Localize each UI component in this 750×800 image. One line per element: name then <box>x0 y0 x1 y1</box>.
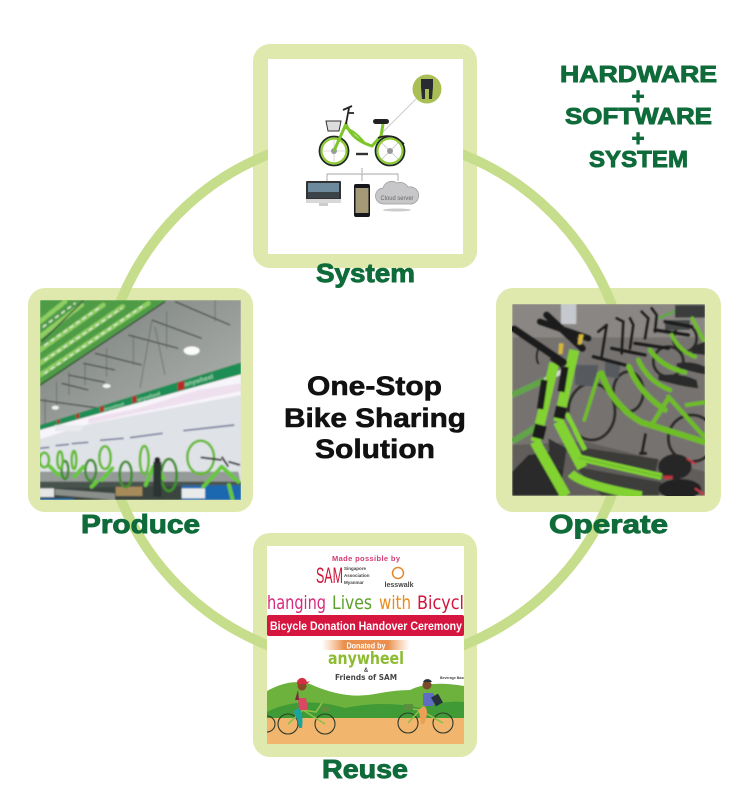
scooter decks <box>578 448 658 473</box>
photo: bike factory: anywheel <box>184 374 214 389</box>
callout: hardware software system: SYSTEM <box>589 146 688 172</box>
scooter stems <box>535 350 662 496</box>
panel: reuse <box>259 546 467 744</box>
poster: bicycle donation ceremony: Beverage Bases <box>440 676 467 680</box>
heading: system label: System <box>316 258 415 288</box>
heading: operate label: Operate <box>549 509 668 539</box>
poster: bicycle donation ceremony: Made possible by <box>332 554 401 563</box>
title: one-stop bike sharing solution: Bike Sharing <box>284 403 466 433</box>
poster: bicycle donation ceremony: lesswalk <box>384 582 414 589</box>
poster: bicycle donation ceremony: Bicycl <box>417 592 464 614</box>
callout: hardware software system <box>560 61 717 172</box>
poster: bicycle donation ceremony: Bicycle Donation Handover Ceremony <box>270 619 462 633</box>
poster: bicycle donation ceremony: Singapore <box>344 566 367 571</box>
title: one-stop bike sharing solution: One-Stop <box>307 371 442 401</box>
callout: hardware software system: HARDWARE <box>560 61 717 87</box>
cycle ring <box>102 136 630 664</box>
photo: bike factory: anywheel <box>103 401 125 412</box>
panel: produce <box>40 300 241 500</box>
poster: bicycle donation ceremony: anywheel <box>328 649 404 669</box>
poster: bicycle donation ceremony: SAM <box>316 563 343 588</box>
poster: bicycle donation ceremony: with <box>379 592 411 614</box>
icon: connected bike diagram <box>306 74 442 217</box>
poster: bicycle donation ceremony: Donated by <box>346 642 386 650</box>
rear bikes <box>568 325 715 462</box>
callout: hardware software system: SOFTWARE <box>565 103 712 129</box>
poster: bicycle donation ceremony: Friends of SAM <box>335 673 397 682</box>
title: one-stop bike sharing solution: Solution <box>315 434 435 464</box>
bike frames <box>584 318 705 442</box>
photo: bike factory: anywheel <box>137 391 162 404</box>
icon: connected bike diagram: Cloud server <box>380 195 414 202</box>
callout: hardware software system: + <box>632 126 644 151</box>
poster: bicycle donation ceremony: Association <box>344 573 370 578</box>
callout: hardware software system: + <box>632 84 644 109</box>
panel: operate <box>512 304 715 499</box>
panel: system <box>268 59 463 254</box>
poster: bicycle donation ceremony: & <box>364 668 369 674</box>
title: one-stop bike sharing solution <box>284 371 466 464</box>
photo: parked green bikes and scooters <box>512 304 715 499</box>
photo: bike factory <box>40 300 241 500</box>
poster: bicycle donation ceremony: hanging <box>267 592 326 614</box>
heading: produce label: Produce <box>81 509 200 539</box>
poster: bicycle donation ceremony <box>259 554 467 744</box>
heading: reuse label: Reuse <box>322 754 408 784</box>
poster: bicycle donation ceremony: Myanmar <box>344 580 364 585</box>
poster: bicycle donation ceremony: Lives <box>332 592 372 614</box>
